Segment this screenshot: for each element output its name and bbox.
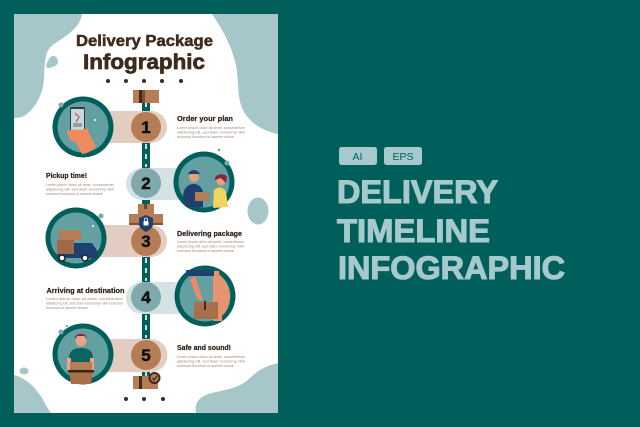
road segments over bands	[142, 143, 150, 339]
badge: EPS	[384, 147, 422, 165]
text block: Arriving at destination	[46, 288, 124, 310]
title: Delivery Package	[76, 33, 213, 50]
text block: Arriving at destination: Lorem ipsum dolor sit amet, consectetuer	[46, 296, 124, 301]
text block: Pickup time!: euismod tincidunt ut laoreet dolore	[46, 191, 103, 196]
text block: Safe and sound!: Safe and sound!	[177, 345, 231, 352]
main heading: DELIVERY	[337, 174, 498, 210]
illustration: courier handing package	[174, 149, 234, 212]
band: step 5	[83, 339, 168, 372]
text block: Delivering package: euismod tincidunt ut laoreet dolore	[177, 248, 234, 253]
text block: Safe and sound!: Lorem ipsum dolor sit amet, consectetuer	[177, 354, 246, 359]
illustration: hand holding phone	[52, 96, 114, 158]
text block: Pickup time!	[46, 173, 115, 196]
text block: Arriving at destination: Arriving at destination	[46, 288, 124, 295]
text block: Order your plan: Order your plan	[177, 116, 233, 123]
number 5	[131, 340, 161, 370]
text block: Pickup time!: Pickup time!	[46, 173, 87, 180]
decorative blob: top left	[14, 14, 82, 118]
icon: bottom package with check	[133, 372, 160, 389]
band: step 3	[76, 225, 167, 257]
band: step 2	[126, 168, 204, 200]
band: step 4	[126, 282, 205, 314]
decorative blob: bottom right	[196, 363, 278, 413]
top dots	[106, 79, 183, 83]
text block: Safe and sound!: adipiscing elit, sed diam nonummy nibh	[177, 358, 245, 364]
text block: Delivering package: Delivering package	[177, 231, 242, 238]
text block: Order your plan	[177, 116, 246, 139]
number 2: 2	[141, 174, 151, 193]
title	[76, 33, 213, 74]
number 2	[131, 168, 161, 198]
title: Infographic	[83, 51, 205, 74]
text block: Delivering package: adipiscing elit, sed diam nonummy nibh	[177, 244, 244, 248]
icon: stacked packages with shield	[129, 204, 163, 232]
main heading: INFOGRAPHIC	[338, 250, 565, 286]
illustration: delivery truck	[46, 208, 106, 268]
text block: Delivering package: Lorem ipsum dolor sit amet, consectetuer	[177, 239, 245, 244]
text block: Order your plan: Lorem ipsum dolor sit amet, consectetuer	[177, 125, 246, 130]
main heading	[337, 174, 565, 286]
panel: poster	[14, 14, 278, 413]
text block: Order your plan: adipiscing elit, sed diam nonummy nibh	[177, 130, 245, 134]
number 1	[131, 112, 161, 142]
text block: Pickup time!: Lorem ipsum dolor sit amet, consectetuer	[46, 182, 115, 187]
illustration: hands carrying package	[174, 266, 236, 326]
text block: Pickup time!: adipiscing elit, sed diam nonummy nibh	[46, 186, 114, 192]
text block: Safe and sound!: euismod tincidunt ut laoreet dolore	[177, 363, 234, 368]
number 3: 3	[141, 232, 151, 251]
badge: EPS: EPS	[392, 151, 414, 163]
number 4	[131, 282, 161, 312]
timeline road	[142, 100, 150, 380]
text block: Order your plan: euismod tincidunt ut laoreet dolore	[177, 134, 234, 139]
main heading: TIMELINE	[337, 213, 490, 249]
number 5: 5	[141, 346, 151, 365]
bottom dots	[124, 397, 165, 401]
text block: Arriving at destination: adipiscing elit, sed diam nonummy nibh euismod	[46, 300, 123, 306]
text block: Safe and sound!	[177, 345, 246, 368]
decorative blob: right oval	[248, 198, 268, 224]
decorative blob: lower left	[20, 368, 28, 374]
band: step 1	[83, 111, 167, 143]
number 4: 4	[141, 288, 151, 307]
number 1: 1	[141, 118, 151, 137]
decorative blob: bottom left	[14, 375, 51, 413]
badge: AI: AI	[353, 151, 362, 163]
number 3	[131, 226, 161, 256]
decorative blob: top right	[212, 14, 278, 134]
icon: top package	[133, 90, 159, 103]
illustration: person with package	[52, 324, 114, 384]
decorative blob: small top	[46, 56, 58, 68]
badge: AI	[339, 147, 377, 165]
text block: Arriving at destination: tincidunt ut laoreet dolore	[46, 305, 88, 310]
text block: Delivering package	[177, 231, 245, 253]
